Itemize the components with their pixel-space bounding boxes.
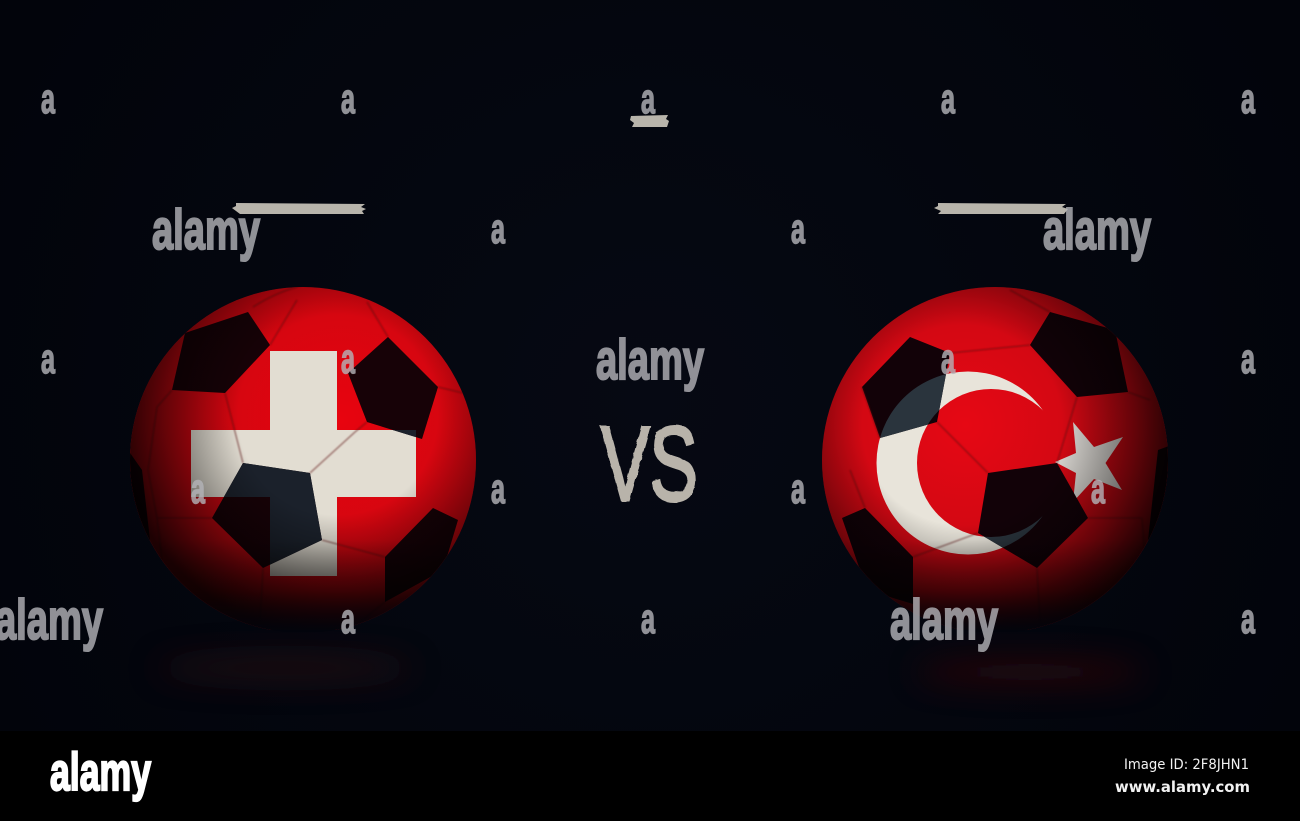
watermark: repeating small a marks: a <box>641 75 655 122</box>
image id: Image ID: 2F8JHN1 <box>1124 757 1249 773</box>
website: www.alamy.com <box>1115 778 1250 796</box>
watermark: repeating small a marks: a <box>1241 335 1255 382</box>
watermark: repeating small a marks: a <box>491 465 505 512</box>
crescent seen through panels <box>880 374 1042 548</box>
watermark: repeating small a marks: a <box>41 75 55 122</box>
dash: centre score placeholder <box>630 115 669 127</box>
panel seams <box>148 287 463 622</box>
watermark: alamy lower right: alamy <box>890 588 998 652</box>
white cross <box>191 351 416 576</box>
black panels <box>128 312 458 602</box>
ball bottom fade <box>848 546 1128 630</box>
VS heading: VS <box>601 405 698 523</box>
watermark: repeating small a marks: a <box>341 595 355 642</box>
dash: left team name placeholder <box>232 203 366 214</box>
watermark: repeating small a marks: a <box>341 335 355 382</box>
watermark: alamy upper right: alamy <box>1043 198 1151 262</box>
black panels <box>842 312 1172 604</box>
watermark: repeating small a marks: a <box>341 75 355 122</box>
panels seen through the cross <box>224 430 416 564</box>
watermark: repeating small a marks: a <box>941 75 955 122</box>
watermark: repeating small a marks: a <box>1241 595 1255 642</box>
watermark: repeating small a marks: a <box>941 335 955 382</box>
reflection under right ball <box>915 660 1145 684</box>
footer logo: alamy <box>50 743 151 802</box>
watermark: repeating small a marks: a <box>191 465 205 512</box>
watermark: repeating small a marks: a <box>791 465 805 512</box>
ball bottom fade <box>168 546 450 630</box>
football: Turkey flag <box>822 287 1168 630</box>
watermark: repeating small a marks: a <box>641 595 655 642</box>
watermark: repeating small a marks: a <box>41 335 55 382</box>
watermark: repeating small a marks: a <box>791 205 805 252</box>
ball shading <box>125 280 485 630</box>
watermark: repeating small a marks <box>41 75 1255 642</box>
watermark: alamy upper left: alamy <box>152 198 260 262</box>
reflection under left ball <box>155 656 415 680</box>
footer banner <box>0 731 1300 821</box>
football: Switzerland flag <box>125 280 485 632</box>
watermark: repeating small a marks: a <box>491 205 505 252</box>
ball shading <box>815 280 1175 630</box>
dash: right team name placeholder <box>934 203 1068 214</box>
white star <box>1055 422 1123 502</box>
watermark: repeating small a marks: a <box>1241 75 1255 122</box>
watermark: alamy centre: alamy <box>596 328 704 392</box>
panel seams <box>850 290 1150 622</box>
white crescent <box>876 372 1043 554</box>
watermark: repeating small a marks: a <box>1091 465 1105 512</box>
